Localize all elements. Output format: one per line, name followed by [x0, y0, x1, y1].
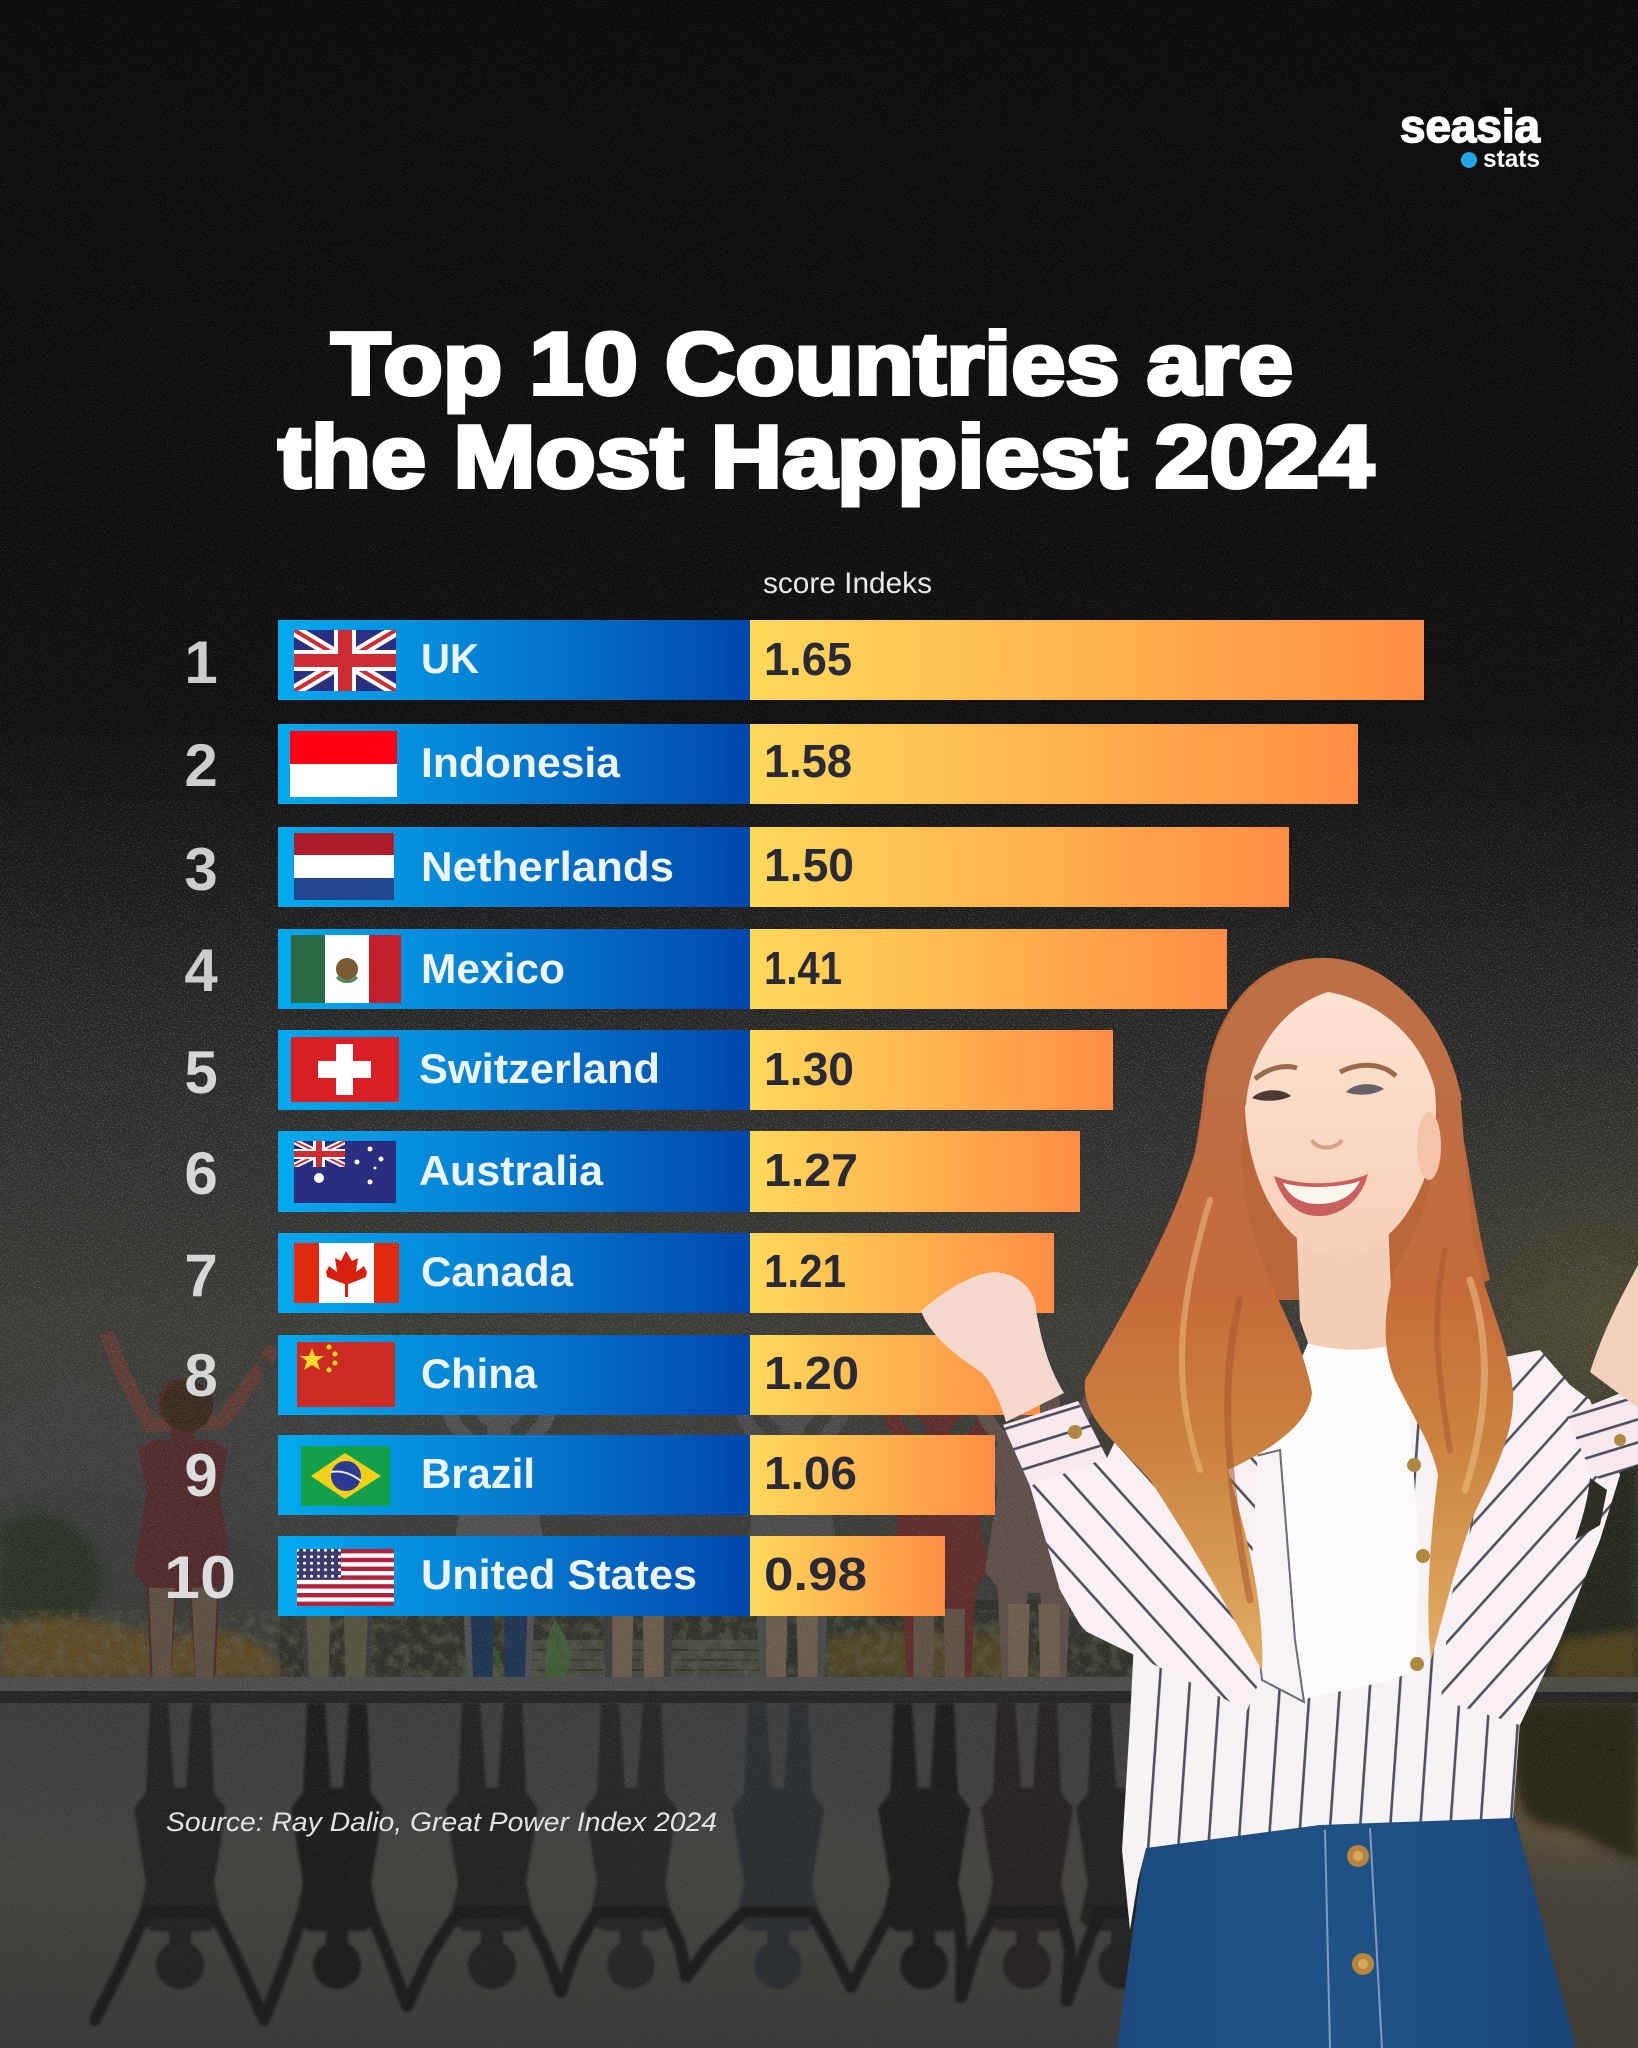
row 6: Australia [184, 1131, 1080, 1212]
flag: United States [297, 1549, 394, 1606]
row 9: Brazil: 9 [184, 1442, 218, 1509]
row 4: Mexico: Mexico [421, 945, 565, 992]
row 4: Mexico [184, 929, 1227, 1009]
axis label: score Indeks: score Indeks [763, 567, 932, 600]
row 9: Brazil: 1.06 [764, 1447, 857, 1499]
row 2: Indonesia [184, 724, 1358, 804]
row 3: Netherlands: 1.50 [764, 839, 854, 891]
row 10: United States [164, 1536, 945, 1616]
row 3: Netherlands: Netherlands [421, 843, 674, 890]
illustration: smiling woman [921, 958, 1638, 2048]
right front lock [1386, 1095, 1513, 1660]
right cuff [1566, 1386, 1638, 1480]
row 8: China: China [421, 1350, 538, 1397]
title: the Most Happiest 2024 [278, 407, 1374, 506]
row 5: Switzerland [184, 1030, 1113, 1110]
row 2: Indonesia: 2 [184, 732, 218, 799]
row 10: United States: 0.98 [764, 1548, 867, 1600]
row 10: United States: 10 [164, 1544, 236, 1611]
person 2 [256, 1357, 418, 1684]
neck [1296, 1215, 1402, 1350]
person 4 [557, 1357, 719, 1684]
row 6: Australia: Australia [419, 1147, 604, 1194]
row 8: China: 8 [184, 1342, 218, 1409]
flag: Netherlands [294, 833, 394, 900]
photo: people standing on the wall [106, 1333, 1115, 1684]
row 8: China: 1.20 [764, 1347, 859, 1399]
reflected silhouettes [95, 1703, 1168, 2020]
row 7: Canada: 1.21 [764, 1245, 846, 1297]
right sleeve and shoulder [1440, 1350, 1620, 1725]
logo: seasia stats: seasia [1400, 100, 1540, 152]
back hair [1160, 958, 1490, 1300]
flag: Brazil [301, 1446, 390, 1506]
row 10: United States: United States [421, 1551, 697, 1598]
row 7: Canada: Canada [421, 1248, 574, 1295]
person 7 [953, 1357, 1115, 1684]
flag: Mexico [291, 935, 401, 1003]
left sleeve [1030, 1401, 1260, 1710]
person 3 [418, 1357, 580, 1684]
row 5: Switzerland: Switzerland [419, 1045, 660, 1092]
row 7: Canada [184, 1233, 1054, 1313]
right hand [1590, 1265, 1638, 1408]
row 6: Australia: 1.27 [764, 1144, 858, 1196]
blouse buttons [1407, 1458, 1430, 1671]
row 5: Switzerland: 1.30 [764, 1043, 854, 1095]
person 6 [858, 1357, 1020, 1684]
row 4: Mexico: 4 [184, 937, 218, 1004]
row 9: Brazil [184, 1435, 995, 1515]
row 1: UK: 1.65 [764, 633, 852, 685]
bar chart: ranking [164, 620, 1424, 1616]
row 6: Australia: 6 [184, 1140, 218, 1207]
face [1245, 988, 1436, 1258]
flag: Switzerland [291, 1037, 399, 1102]
photo: stone wall edge [0, 1677, 1638, 1703]
logo dot icon [1461, 152, 1477, 168]
nose [1312, 1140, 1342, 1148]
row 3: Netherlands: 3 [184, 836, 218, 903]
right ear [1417, 1112, 1441, 1180]
row 4: Mexico: 1.41 [764, 942, 842, 994]
hair strands [1182, 1200, 1484, 1600]
row 9: Brazil: Brazil [421, 1450, 535, 1497]
row 8: China [184, 1335, 1040, 1415]
skirt [1117, 1810, 1576, 2048]
row 1: UK: UK [421, 635, 479, 682]
blouse placket [1240, 1450, 1304, 1702]
logo: seasia stats: stats [1483, 145, 1540, 173]
flag: Australia [294, 1141, 396, 1203]
row 7: Canada: 7 [184, 1242, 218, 1309]
eyebrows [1255, 1066, 1297, 1079]
source note: Source: Ray Dalio, Great Power Index 2024 [166, 1807, 717, 1837]
title [278, 314, 1374, 506]
left cuff [1003, 1401, 1107, 1486]
row 1: UK: 1 [184, 629, 218, 696]
flag: China [297, 1342, 395, 1407]
white t-shirt [1262, 1340, 1420, 1700]
blouse body [1122, 1400, 1540, 1930]
row 5: Switzerland: 5 [184, 1039, 218, 1106]
flag: UK [294, 630, 396, 691]
photo: water with reflections [0, 1703, 1638, 2048]
hair crown [1206, 958, 1462, 1110]
smile [1274, 1174, 1368, 1216]
left forearm and fist [921, 1272, 1064, 1422]
left front lock [1085, 1100, 1312, 1671]
gap between right sleeve and body [1575, 1478, 1607, 1540]
row 2: Indonesia: 1.58 [764, 735, 852, 787]
row 3: Netherlands [184, 827, 1289, 907]
row 1: UK [184, 620, 1424, 700]
row 2: Indonesia: Indonesia [421, 739, 621, 786]
person 1 in maroon dress [106, 1333, 275, 1684]
flag: Indonesia [290, 731, 397, 797]
person 5 [711, 1357, 873, 1684]
photo: mountains, greenery and flowers behind the wall [0, 1368, 1638, 1680]
flag: Canada [294, 1243, 399, 1303]
eyes [1252, 1090, 1291, 1101]
title: Top 10 Countries are [331, 314, 1293, 413]
